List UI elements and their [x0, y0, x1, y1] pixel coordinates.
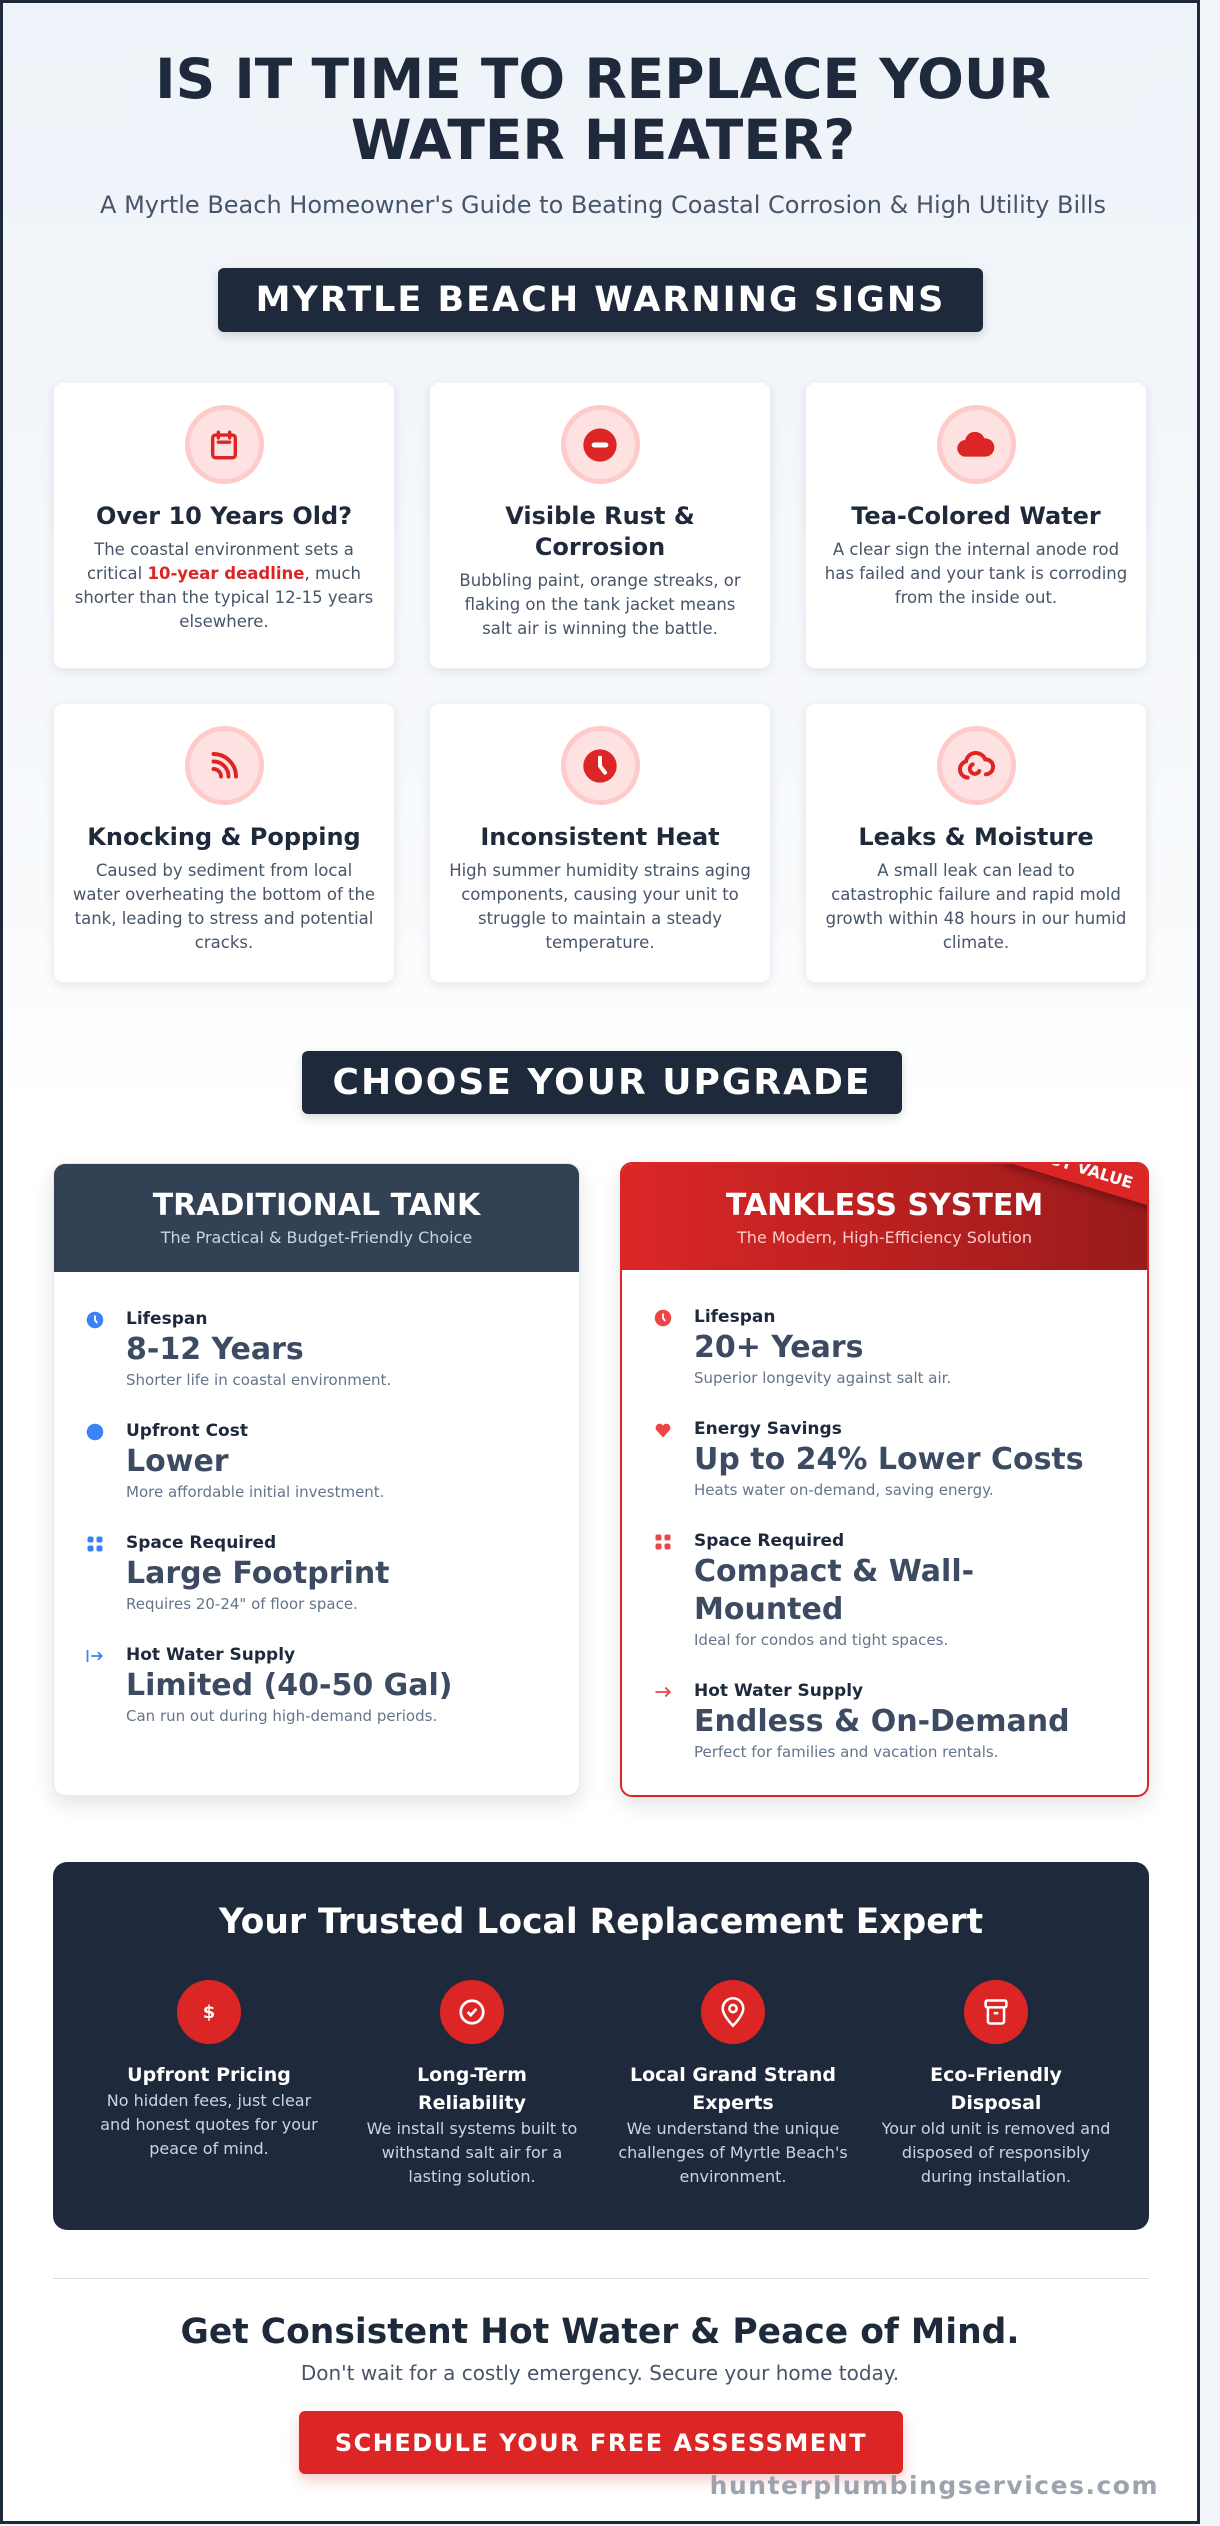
item: lifespan: Lifespan — [694, 1307, 775, 1327]
item: lifespan: Lifespan — [126, 1309, 207, 1329]
item: hot water — [86, 1645, 453, 1725]
item: lifespan: Superior longevity against salt air. — [694, 1369, 951, 1387]
subtitle: A Myrtle Beach Homeowner's Guide to Beating Coastal Corrosion & High Utility Bills — [100, 191, 1106, 219]
heading: warning signs: MYRTLE BEACH WARNING SIGNS — [256, 280, 945, 320]
item: energy: Heats water on-demand, saving energy. — [694, 1481, 994, 1499]
item: energy: Energy Savings — [694, 1419, 842, 1439]
item: hot water: Hot Water Supply — [126, 1645, 295, 1665]
card: over 10 years old — [53, 382, 395, 669]
item: lifespan: 8-12 Years — [126, 1332, 304, 1367]
panel: trusted local expert — [53, 1862, 1149, 2230]
item: lifespan: Shorter life in coastal environment. — [126, 1371, 391, 1389]
card: inconsistent heat: Inconsistent Heat — [480, 823, 720, 851]
card: rust: Corrosion — [535, 533, 665, 561]
item: hot water: Perfect for families and vacation rentals. — [694, 1743, 998, 1761]
header: tankless — [622, 1164, 1147, 1270]
item: space: Requires 20-24" of floor space. — [126, 1595, 358, 1613]
header: tankless: TANKLESS SYSTEM — [726, 1188, 1043, 1223]
item: space: Mounted — [694, 1592, 843, 1627]
header: traditional: The Practical & Budget-Friendly Choice — [161, 1228, 472, 1247]
feature: reliability: We install systems built to withstand salt air for a lasting solution. — [367, 2119, 577, 2186]
feature: local experts: We understand the unique challenges of Myrtle Beach's environment. — [618, 2119, 848, 2186]
button: schedule: SCHEDULE YOUR FREE ASSESSMENT — [335, 2428, 867, 2456]
card: leaks — [805, 703, 1147, 983]
card: leaks: A small leak can lead to catastrophic failure and rapid mold growth within 48 hours in our humid climate. — [826, 861, 1126, 952]
card: over 10 years old: The coastal environment sets a critical 10-year deadline, much shorter than the typical 12-15 years elsewhere. — [75, 540, 373, 631]
item: lifespan — [654, 1307, 951, 1387]
feature: local experts — [618, 1980, 848, 2186]
title: IS IT TIME TO REPLACE YOUR — [155, 47, 1051, 111]
icon: clock — [560, 726, 640, 805]
card: knocking — [53, 703, 395, 983]
item: upfront cost: More affordable initial investment. — [126, 1483, 384, 1501]
feature: upfront pricing — [100, 1980, 318, 2158]
item: upfront cost: Lower — [126, 1444, 229, 1479]
heading: choose your upgrade — [302, 1051, 902, 1114]
feature: eco disposal — [882, 1980, 1110, 2186]
feature: upfront pricing: No hidden fees, just clear and honest quotes for your peace of mind. — [100, 2091, 318, 2158]
item: space — [656, 1531, 974, 1649]
heading: call to action: Get Consistent Hot Water & Peace of Mind. — [181, 2312, 1019, 2352]
card: inconsistent heat: High summer humidity strains aging components, causing your unit to struggle to maintain a steady temperature. — [449, 861, 751, 952]
item: space — [88, 1533, 390, 1613]
icon: calendar — [184, 405, 264, 484]
card: over 10 years old: Over 10 Years Old? — [96, 502, 352, 530]
header: tankless: The Modern, High-Efficiency Solution — [737, 1228, 1032, 1247]
ribbon: best value — [980, 1120, 1182, 1212]
item: space: Ideal for condos and tight spaces. — [694, 1631, 948, 1649]
item: energy: Up to 24% Lower Costs — [694, 1442, 1084, 1477]
card: rust: Bubbling paint, orange streaks, or flaking on the tank jacket means salt air is winning the battle. — [459, 571, 741, 638]
item: hot water: Endless & On-Demand — [694, 1704, 1070, 1739]
card: inconsistent heat — [429, 703, 771, 983]
feature: upfront pricing: Upfront Pricing — [127, 2064, 291, 2086]
item: space: Space Required — [126, 1533, 276, 1553]
feature: reliability: Reliability — [418, 2092, 526, 2114]
item: upfront cost: Upfront Cost — [126, 1421, 248, 1441]
feature: eco disposal: Your old unit is removed and disposed of responsibly during installation. — [882, 2119, 1110, 2186]
card: knocking: Knocking & Popping — [87, 823, 361, 851]
feature: local experts: Local Grand Strand — [630, 2064, 836, 2086]
item: hot water: Hot Water Supply — [694, 1681, 863, 1701]
card: tea colored water: Tea-Colored Water — [851, 502, 1101, 530]
icon: minus circle — [560, 405, 640, 484]
feature: local experts: Experts — [692, 2092, 774, 2114]
feature: eco disposal: Disposal — [951, 2092, 1041, 2114]
card: knocking: Caused by sediment from local water overheating the bottom of the tank, leading to stress and potential cracks. — [73, 861, 375, 952]
item: space: Space Required — [694, 1531, 844, 1551]
text: cta subtitle: Don't wait for a costly emergency. Secure your home today. — [301, 2361, 899, 2385]
item: hot water — [656, 1681, 1070, 1761]
feature: eco disposal: Eco-Friendly — [930, 2064, 1062, 2086]
title: WATER HEATER? — [351, 108, 855, 172]
heading: expert: Your Trusted Local Replacement Expert — [219, 1902, 983, 1942]
card: tea colored water: A clear sign the internal anode rod has failed and your tank is corroding from the inside out. — [825, 540, 1127, 607]
feature: upfront pricing: $ — [203, 2002, 215, 2022]
card: rust — [429, 382, 771, 669]
title — [155, 47, 1051, 172]
item: upfront cost — [86, 1421, 384, 1501]
panel: traditional tank — [53, 1163, 580, 1796]
button: schedule — [299, 2411, 903, 2474]
item: lifespan: 20+ Years — [694, 1330, 864, 1365]
item: hot water: Can run out during high-demand periods. — [126, 1707, 437, 1725]
icon: sound waves — [184, 726, 264, 805]
icon: cloud — [936, 405, 1016, 484]
feature: reliability — [367, 1980, 577, 2186]
heading: choose your upgrade: CHOOSE YOUR UPGRADE — [333, 1062, 871, 1103]
header: traditional — [54, 1164, 579, 1272]
item: energy — [656, 1419, 1084, 1499]
card: leaks: Leaks & Moisture — [858, 823, 1094, 851]
feature: reliability: Long-Term — [417, 2064, 527, 2086]
item: space: Large Footprint — [126, 1556, 390, 1591]
item: hot water: Limited (40-50 Gal) — [126, 1668, 453, 1703]
card: tea colored water — [805, 382, 1147, 669]
watermark: hunterplumbingservices.com — [710, 2471, 1159, 2500]
panel: tankless system — [620, 1162, 1149, 1797]
icon: leak — [936, 726, 1016, 805]
item: space: Compact & Wall- — [694, 1554, 974, 1589]
heading: warning signs — [218, 268, 983, 332]
item: lifespan — [86, 1309, 391, 1389]
card: rust: Visible Rust & — [505, 502, 695, 530]
header: traditional: TRADITIONAL TANK — [153, 1188, 480, 1223]
